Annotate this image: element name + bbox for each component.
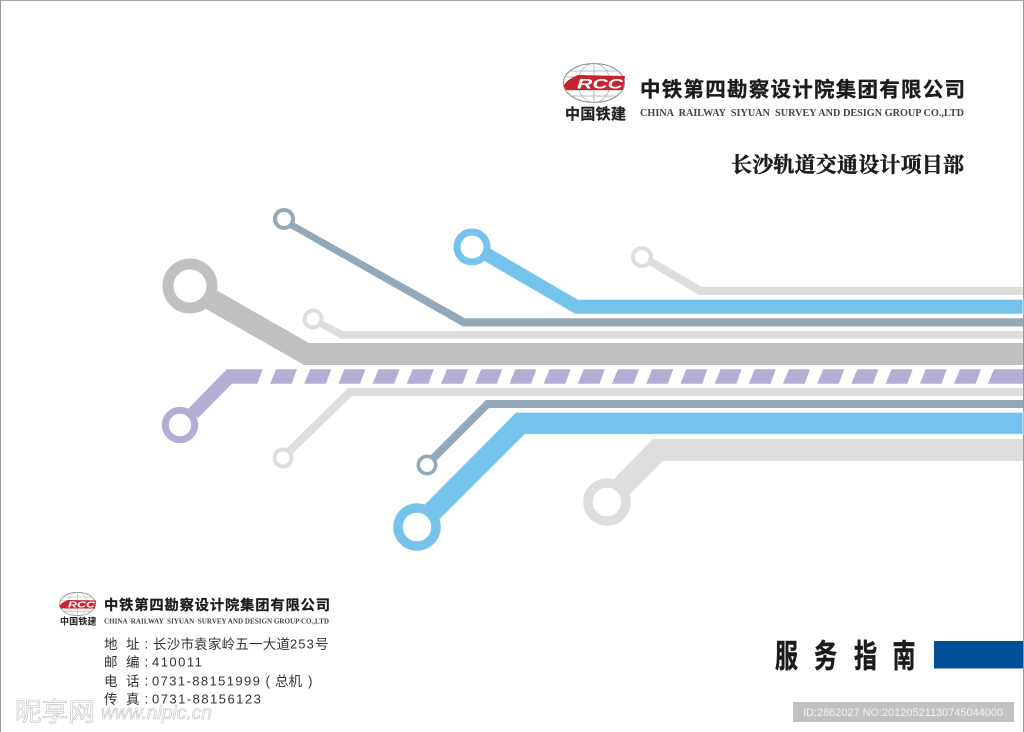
service guide heading: 指 [854,638,877,674]
trace: blue upper [457,232,1023,314]
circuit graphic [165,210,1023,546]
footer logo: CRCC globe: RCC [68,600,96,610]
address: : [144,636,148,652]
postcode: : [144,655,148,670]
fax [104,692,262,707]
telephone: 0731-88151999 [152,674,261,689]
trace: light grey middle upper [304,310,1023,339]
telephone: ) [308,674,312,689]
telephone [104,674,312,689]
header logo: CRCC globe: 中国铁建 [565,105,626,123]
address: 号 [315,637,328,652]
address: 253 [290,637,315,652]
postcode: 编 [126,655,140,670]
telephone: 总机 [275,674,302,689]
watermark: site name: www.nipic.cn [101,703,212,724]
address: 地 [104,637,118,652]
trace: slate upper [275,210,1023,326]
postcode [104,655,203,670]
project department heading: 长沙轨道交通设计项目部 [731,153,964,177]
postcode: 410011 [152,655,203,670]
trace: blue lower [398,412,1023,546]
watermark: image ID box: ID:2862027 NO:20120521130745044000 [803,707,1003,719]
footer company English name: CHINA RAILWAY SIYUAN SURVEY AND DESIGN GROUP CO.,LTD [104,616,329,626]
footer logo: CRCC globe: 中国铁建 [60,616,96,626]
address: 长沙市袁家岭五一大道 [153,636,290,652]
service guide heading: 务 [814,638,837,674]
telephone: 话 [126,674,140,689]
header logo: CRCC globe: RCC [577,76,624,92]
fax: 传 [104,692,118,707]
watermark: image ID box [793,702,1014,722]
telephone: ( [266,674,270,689]
header company English name: CHINA RAILWAY SIYUAN SURVEY AND DESIGN GROUP CO.,LTD [640,108,964,119]
service guide heading: 南 [892,638,916,674]
postcode: 邮 [104,655,118,670]
trace: light grey lower [588,439,1023,521]
navy accent bar [934,641,1024,668]
fax: : [144,692,148,707]
service guide heading [775,638,916,674]
telephone: : [144,674,148,689]
watermark: site name: 昵享网 [15,697,95,727]
header company name: 中铁第四勘察设计院集团有限公司 [640,78,965,102]
fax: 真 [126,692,140,707]
trace: light grey upper right [633,248,1023,295]
service guide heading: 服 [775,638,798,674]
address [104,636,328,652]
trace: purple dashed [165,369,1023,440]
header logo: CRCC globe [564,64,626,123]
trace: slate lower [418,400,1023,474]
trace: thick grey [168,264,1023,365]
address: 址 [126,637,140,652]
fax: 0731-88156123 [152,692,262,707]
footer company name: 中铁第四勘察设计院集团有限公司 [104,596,330,614]
watermark: site name [15,697,212,727]
contact details [104,636,328,707]
telephone: 电 [104,674,118,689]
trace: light grey middle lower [274,388,1023,466]
footer logo: CRCC globe [60,592,96,626]
